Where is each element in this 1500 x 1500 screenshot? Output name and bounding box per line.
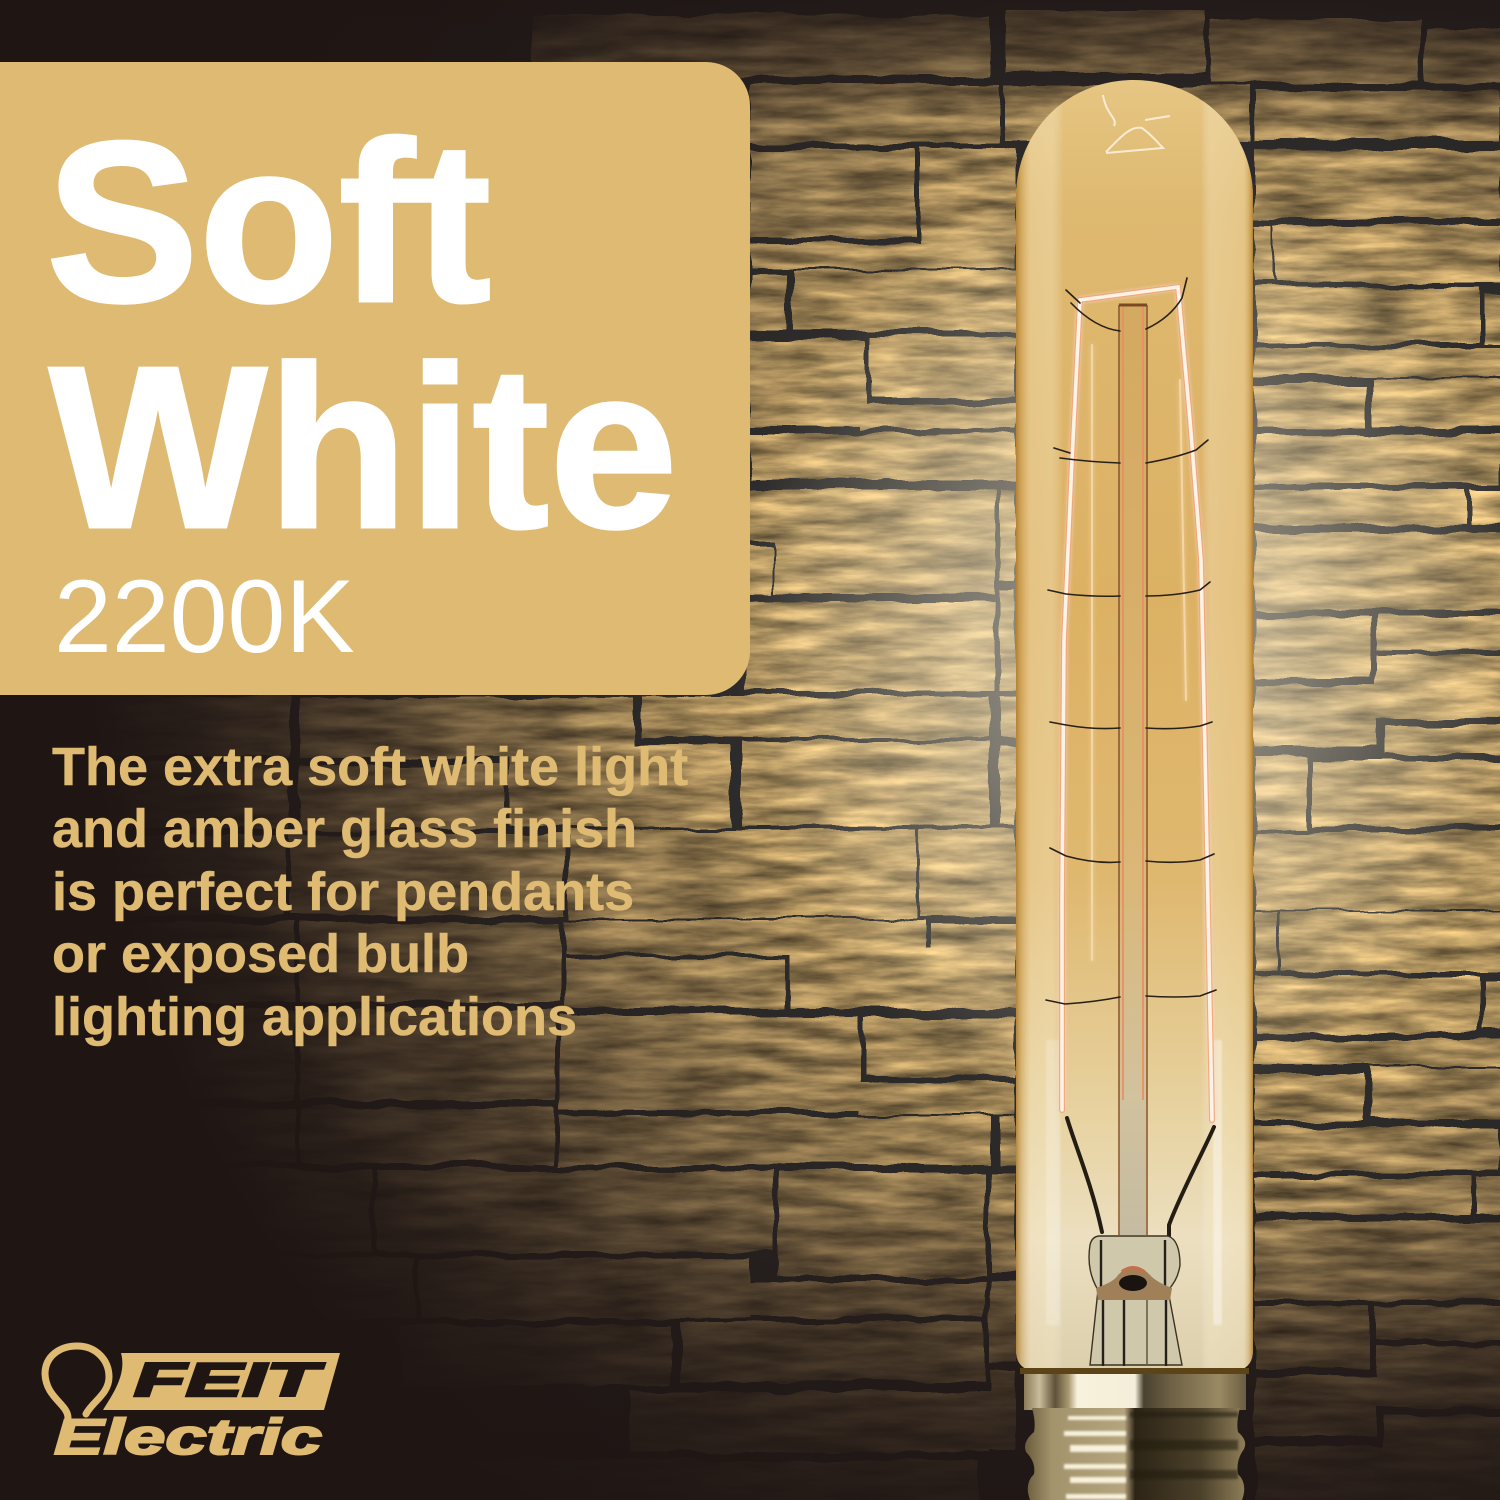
description text: The extra soft white light (52, 737, 688, 797)
description text: lighting applications (52, 987, 577, 1047)
logo badge with FEIT (103, 1353, 340, 1410)
panel: soft white (0, 62, 750, 695)
logo badge with FEIT: FEIT (134, 1353, 326, 1406)
lead wires (1067, 1118, 1214, 1236)
reflection at bulb top (1103, 95, 1170, 153)
heading: Soft: Soft (46, 94, 491, 350)
logo: Feit Electric (45, 1346, 340, 1465)
colour temperature: 2200K (54, 559, 355, 675)
glass support rod (1119, 305, 1147, 1235)
icon: bulb outline (45, 1346, 109, 1418)
description text: and amber glass finish (52, 799, 637, 859)
heading: White: White (49, 318, 678, 576)
light glow (600, 60, 1500, 1260)
bulb (1016, 80, 1253, 1500)
logo wordmark Electric: Electric (54, 1409, 322, 1465)
description text (52, 737, 688, 1047)
metal screw base (1020, 1368, 1249, 1500)
glass stem (1089, 1236, 1182, 1366)
description text: is perfect for pendants (52, 862, 634, 922)
support wires (1046, 278, 1216, 1004)
description text: or exposed bulb (52, 924, 469, 984)
filament (1046, 278, 1216, 1120)
bulb glass (1016, 80, 1253, 1370)
